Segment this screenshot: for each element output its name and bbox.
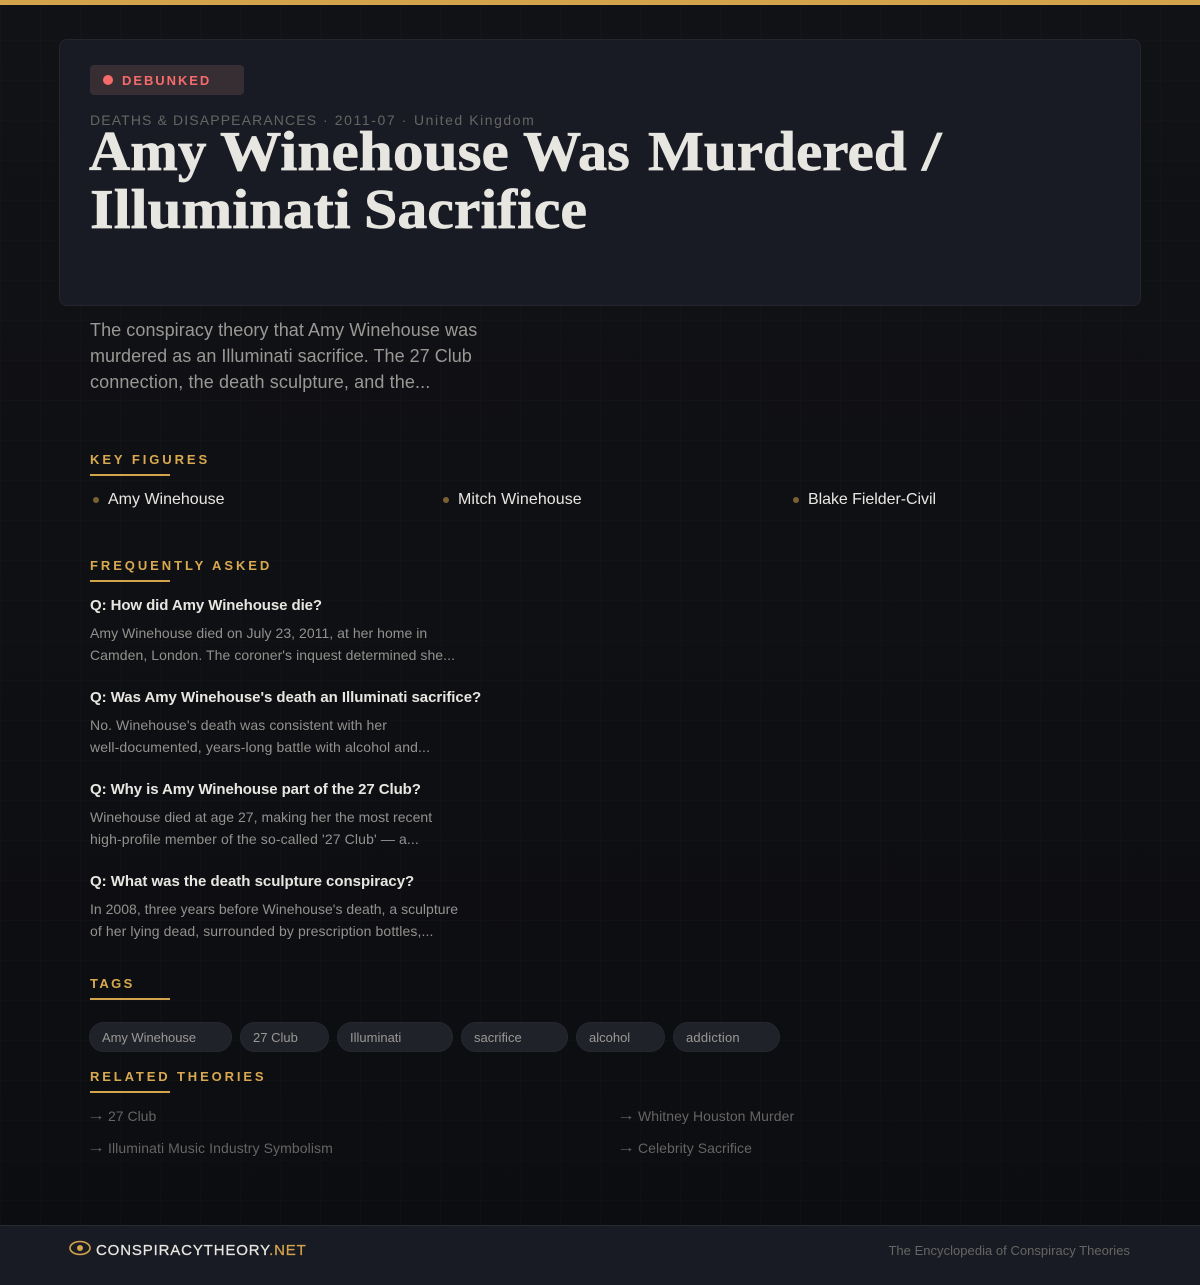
tag: Amy Winehouse: Amy Winehouse bbox=[102, 1030, 196, 1045]
figure: Blake Fielder-Civil: Blake Fielder-Civil bbox=[808, 491, 936, 508]
tag: alcohol: alcohol bbox=[589, 1030, 630, 1045]
heading: key figures: KEY FIGURES bbox=[90, 452, 210, 467]
tag: sacrifice bbox=[461, 1022, 568, 1052]
title: Illuminati bbox=[90, 179, 351, 241]
heading: frequently asked: FREQUENTLY ASKED bbox=[90, 558, 272, 573]
tag: 27 Club bbox=[240, 1022, 329, 1052]
heading: related theories: RELATED THEORIES bbox=[90, 1069, 266, 1084]
related link: Illuminati Music Industry Symbolism: → bbox=[87, 1139, 105, 1155]
faq 2 bbox=[90, 689, 481, 755]
related link: 27 Club bbox=[87, 1107, 156, 1124]
faq 2: well-documented, years-long battle with alcohol and... bbox=[90, 739, 430, 755]
faq 2: Q: Was Amy Winehouse's death an Illuminati sacrifice? bbox=[90, 689, 481, 706]
tag: addiction: addiction bbox=[686, 1030, 740, 1045]
faq 2: No. Winehouse's death was consistent with her bbox=[90, 717, 387, 733]
related link: Celebrity Sacrifice: → bbox=[617, 1139, 635, 1155]
summary text: connection, the death sculpture, and the... bbox=[90, 372, 430, 392]
footer bbox=[0, 1225, 1200, 1285]
faq 1 bbox=[90, 597, 455, 663]
title: Winehouse bbox=[220, 121, 509, 183]
title: / bbox=[922, 121, 941, 183]
faq 4: of her lying dead, surrounded by prescription bottles,... bbox=[90, 923, 433, 939]
title: Was bbox=[523, 121, 630, 183]
faq 4: Q: What was the death sculpture conspiracy? bbox=[90, 873, 414, 890]
title: Sacrifice bbox=[364, 179, 587, 241]
faq 3: high-profile member of the so-called '27 Club' — a... bbox=[90, 831, 419, 847]
category and date line bbox=[90, 112, 535, 128]
related link: Illuminati Music Industry Symbolism: Illuminati Music Industry Symbolism bbox=[108, 1140, 333, 1156]
faq 4: In 2008, three years before Winehouse's death, a sculpture bbox=[90, 901, 458, 917]
category and date line: United Kingdom bbox=[414, 112, 535, 128]
faq 3: Q: Why is Amy Winehouse part of the 27 Club? bbox=[90, 781, 421, 798]
tag: addiction bbox=[673, 1022, 780, 1052]
panel: header card bbox=[59, 39, 1141, 306]
tag: Illuminati bbox=[337, 1022, 453, 1052]
icon: eye logo bbox=[69, 1240, 91, 1256]
icon: status dot bbox=[103, 75, 113, 85]
related link: 27 Club: → bbox=[87, 1107, 105, 1123]
faq 1: Camden, London. The coroner's inquest determined she... bbox=[90, 647, 455, 663]
category and date line: DEATHS & DISAPPEARANCES bbox=[90, 112, 317, 128]
logo wordmark: CONSPIRACYTHEORY.NET bbox=[96, 1242, 307, 1259]
footer tagline: The Encyclopedia of Conspiracy Theories bbox=[888, 1243, 1130, 1258]
faq 3: Winehouse died at age 27, making her the most recent bbox=[90, 809, 432, 825]
badge label: DEBUNKED bbox=[122, 73, 211, 88]
summary text: The conspiracy theory that Amy Winehouse was bbox=[90, 320, 477, 340]
related link: 27 Club: 27 Club bbox=[108, 1108, 156, 1124]
faq 1: Q: How did Amy Winehouse die? bbox=[90, 597, 322, 614]
faq 3 bbox=[90, 781, 432, 847]
figure: Amy Winehouse: Amy Winehouse bbox=[108, 491, 224, 508]
tag: 27 Club: 27 Club bbox=[253, 1030, 298, 1045]
figure: Mitch Winehouse: Mitch Winehouse bbox=[458, 491, 582, 508]
faq 1: Amy Winehouse died on July 23, 2011, at her home in bbox=[90, 625, 427, 641]
summary text: murdered as an Illuminati sacrifice. The 27 Club bbox=[90, 346, 472, 366]
tag: Illuminati: Illuminati bbox=[350, 1030, 401, 1045]
heading: tags: TAGS bbox=[90, 976, 135, 991]
tag: alcohol bbox=[576, 1022, 665, 1052]
summary text bbox=[90, 320, 477, 392]
title bbox=[89, 121, 943, 241]
faq 4 bbox=[90, 873, 458, 939]
status badge: debunked bbox=[90, 65, 244, 95]
tag: sacrifice: sacrifice bbox=[474, 1030, 522, 1045]
related link: Whitney Houston Murder: → bbox=[617, 1107, 635, 1123]
related link: Whitney Houston Murder: Whitney Houston Murder bbox=[638, 1108, 794, 1124]
top accent bar bbox=[0, 0, 1200, 5]
tag: Amy Winehouse bbox=[89, 1022, 232, 1052]
title: Murdered bbox=[648, 121, 907, 183]
category and date line: · 2011-07 · bbox=[323, 112, 408, 128]
related link: Celebrity Sacrifice: Celebrity Sacrifice bbox=[638, 1140, 752, 1156]
title: Amy bbox=[89, 121, 206, 183]
